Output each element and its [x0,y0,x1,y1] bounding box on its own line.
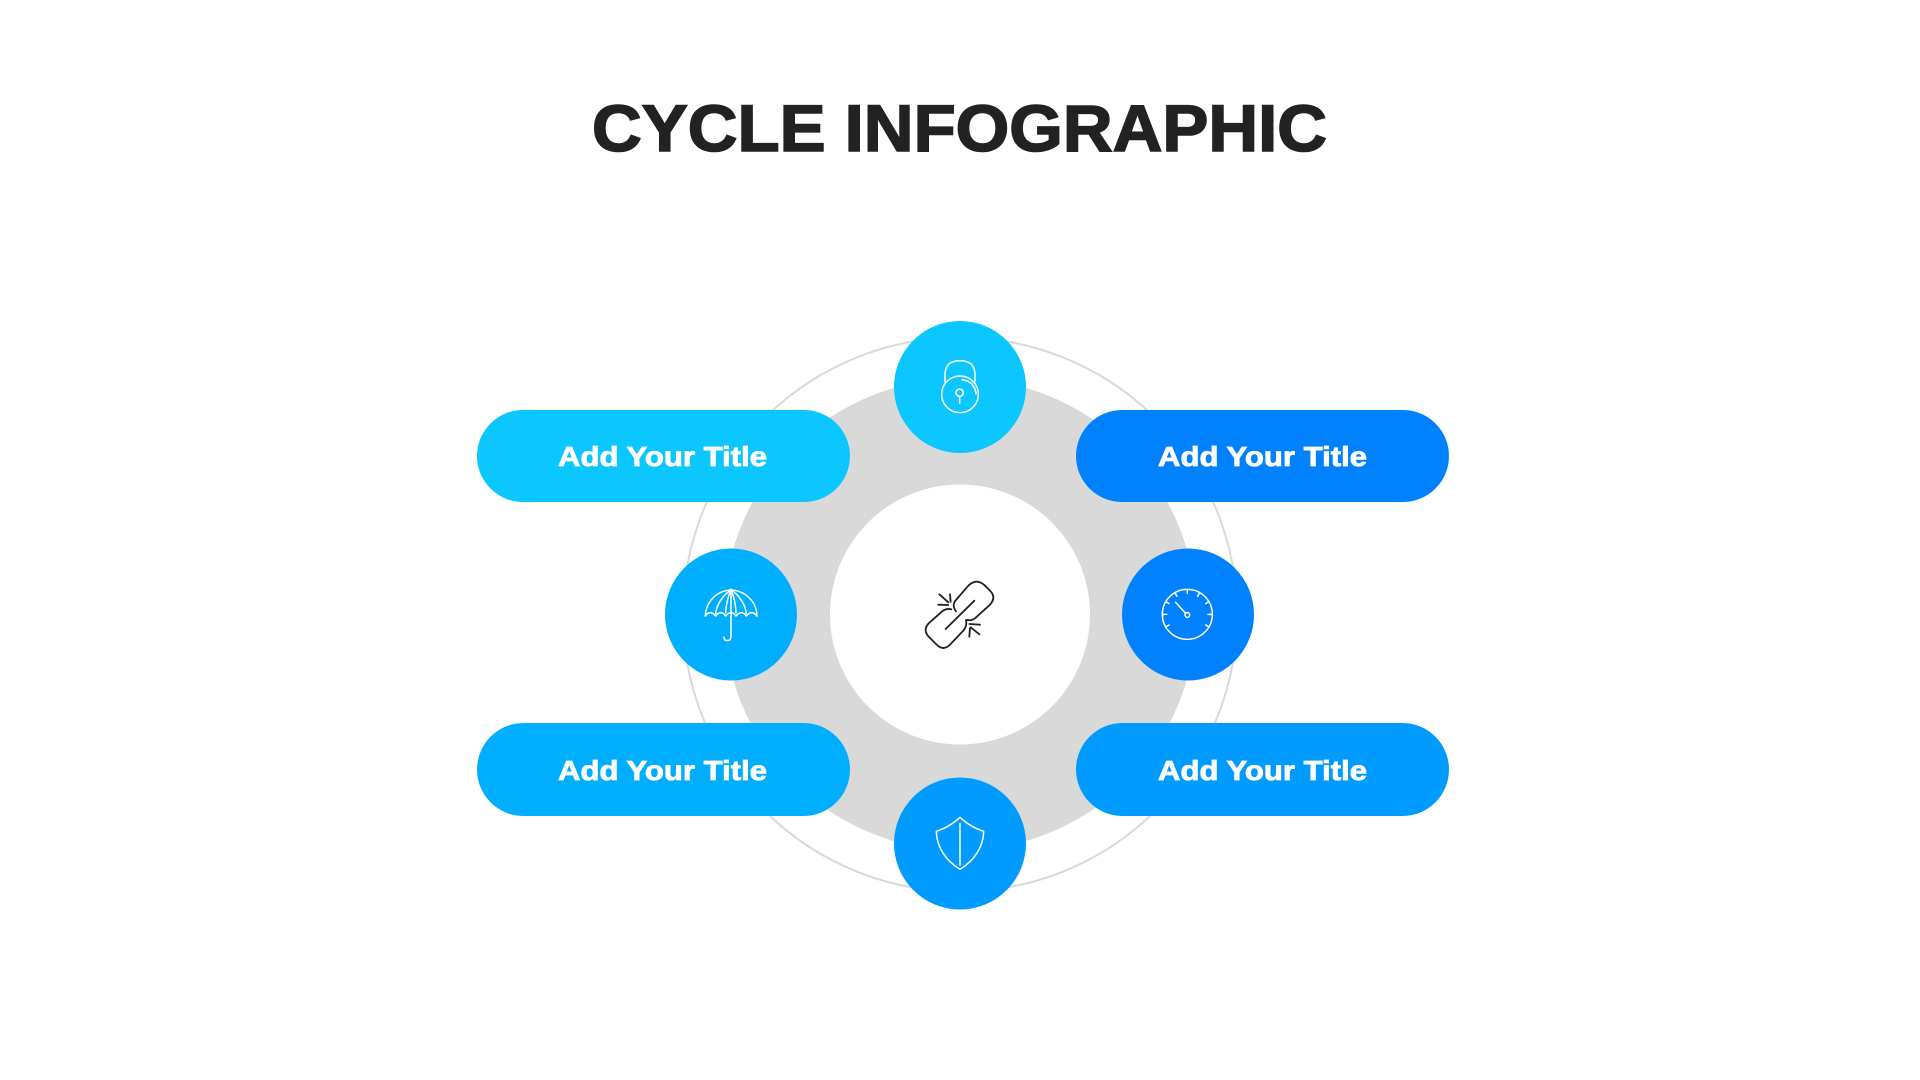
pill: bottom right: Add Your Title [1158,755,1367,786]
node: right circle with speedometer icon [1122,548,1254,680]
node: bottom circle with shield icon [894,778,1026,910]
pill: top right [1076,410,1449,502]
icon: padlock [942,361,978,413]
pill: top left [477,410,850,502]
title: CYCLE INFOGRAPHIC [592,91,1327,165]
pill: top left: Add Your Title [558,441,767,472]
outer thin ring [683,338,1237,892]
pill: bottom left [477,723,850,816]
icon: umbrella [705,589,757,641]
grey donut ring [777,432,1143,798]
node: top circle with padlock icon [894,321,1026,453]
pill: top right: Add Your Title [1158,441,1367,472]
icon: speedometer [1162,589,1212,639]
pill: bottom left: Add Your Title [558,755,767,786]
node: left circle with umbrella icon [665,548,797,680]
icon: shield [936,817,984,869]
pill: bottom right [1076,723,1449,816]
centre icon: broken chain link [926,582,993,648]
